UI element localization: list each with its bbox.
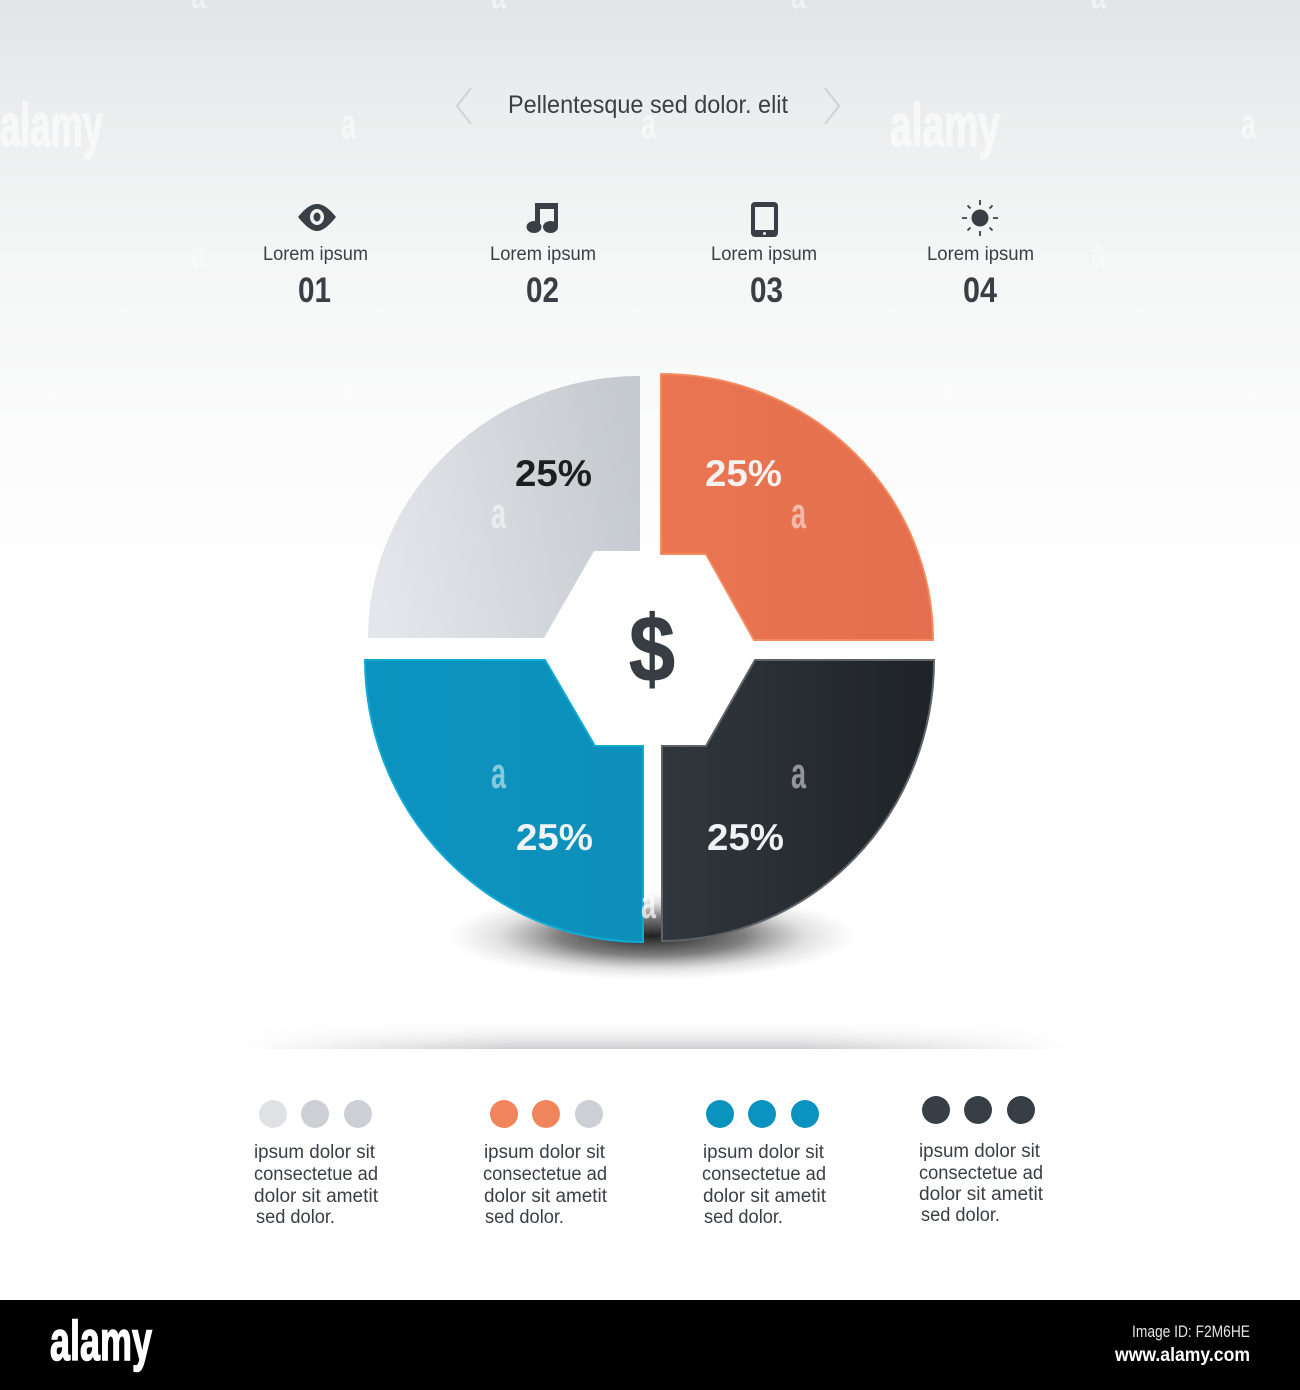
segment: blue xyxy=(365,660,643,942)
segment: dark: 25% xyxy=(707,817,784,858)
chevron right xyxy=(825,88,839,124)
watermark: alamy xyxy=(0,92,103,159)
number: 03 xyxy=(750,271,783,310)
item 03 xyxy=(711,202,817,310)
watermark: a xyxy=(41,360,56,407)
label: Lorem ipsum xyxy=(711,244,817,265)
text: consectetue ad xyxy=(483,1164,607,1185)
watermark: a xyxy=(1241,360,1256,407)
number: 01 xyxy=(298,271,331,310)
icon: eye xyxy=(298,204,336,231)
text: dolor sit ametit xyxy=(484,1186,608,1207)
text: sed dolor. xyxy=(921,1205,1000,1226)
watermark: a xyxy=(341,360,356,407)
website: www.alamy.com xyxy=(1114,1345,1250,1366)
text xyxy=(254,1142,379,1228)
legend column 2 xyxy=(483,1100,608,1228)
watermark letters on pie: a xyxy=(791,489,806,538)
dots xyxy=(259,1100,372,1128)
label: Lorem ipsum xyxy=(490,244,596,265)
legend column 3 xyxy=(702,1100,827,1228)
text: ipsum dolor sit xyxy=(703,1142,825,1163)
watermark: alamy xyxy=(1045,484,1151,542)
text: sed dolor. xyxy=(704,1207,783,1228)
segment: blue: 25% xyxy=(516,817,593,858)
background gradient xyxy=(0,0,1300,650)
label: Lorem ipsum xyxy=(927,244,1034,265)
number: 04 xyxy=(963,271,997,310)
text: ipsum dolor sit xyxy=(484,1142,606,1163)
watermark: a xyxy=(341,100,356,147)
watermark letters on pie: a xyxy=(491,749,506,798)
text xyxy=(702,1142,827,1228)
segment: gray xyxy=(368,376,640,638)
watermark xyxy=(0,0,1256,542)
segment: gray: 25% xyxy=(515,453,592,494)
segment: dark xyxy=(662,660,934,941)
text: sed dolor. xyxy=(485,1207,564,1228)
text: dolor sit ametit xyxy=(919,1184,1044,1205)
legend column 4 xyxy=(919,1096,1044,1226)
dots xyxy=(922,1096,1035,1124)
item 02 xyxy=(490,203,596,310)
watermark letters on pie: a xyxy=(791,749,806,798)
heading: Pellentesque sed dolor. elit xyxy=(508,91,788,119)
item 01 xyxy=(263,204,368,310)
text xyxy=(919,1141,1044,1226)
footer logo: alamy xyxy=(50,1309,152,1372)
segment: orange: 25% xyxy=(705,453,782,494)
dots xyxy=(490,1100,603,1128)
icon: music note xyxy=(526,203,558,233)
segment: orange xyxy=(661,374,933,640)
watermark: a xyxy=(1091,230,1106,277)
watermark: a xyxy=(941,360,956,407)
dots xyxy=(706,1100,819,1128)
text: sed dolor. xyxy=(256,1207,335,1228)
image id: Image ID: F2M6HE xyxy=(1132,1322,1250,1341)
title with chevrons xyxy=(457,88,839,124)
watermark: a xyxy=(641,100,656,147)
text: consectetue ad xyxy=(702,1164,826,1185)
icon: tablet xyxy=(751,202,778,237)
item 04 xyxy=(927,200,1034,310)
pie drop shadow xyxy=(447,892,857,980)
text: consectetue ad xyxy=(254,1164,378,1185)
watermark: a xyxy=(1241,100,1256,147)
watermark letters on pie: a xyxy=(491,489,506,538)
watermark: alamy xyxy=(155,484,261,542)
icon: sun xyxy=(962,200,998,236)
watermark letters on pie xyxy=(491,489,806,928)
footer bar xyxy=(0,1300,1300,1390)
text xyxy=(483,1142,608,1228)
icon: dollar sign: $ xyxy=(629,596,675,701)
legend column 1 xyxy=(254,1100,379,1228)
text: dolor sit ametit xyxy=(254,1186,379,1207)
watermark letters on pie: a xyxy=(641,879,656,928)
text: dolor sit ametit xyxy=(703,1186,827,1207)
label: Lorem ipsum xyxy=(263,244,368,265)
chevron left xyxy=(457,88,471,124)
watermark: a xyxy=(191,230,206,277)
text: ipsum dolor sit xyxy=(254,1142,376,1163)
pie chart xyxy=(365,374,934,942)
number: 02 xyxy=(526,271,559,310)
ground shadow xyxy=(286,1031,1024,1049)
text: ipsum dolor sit xyxy=(919,1141,1041,1162)
text: consectetue ad xyxy=(919,1163,1043,1184)
watermark: alamy xyxy=(890,92,1000,159)
